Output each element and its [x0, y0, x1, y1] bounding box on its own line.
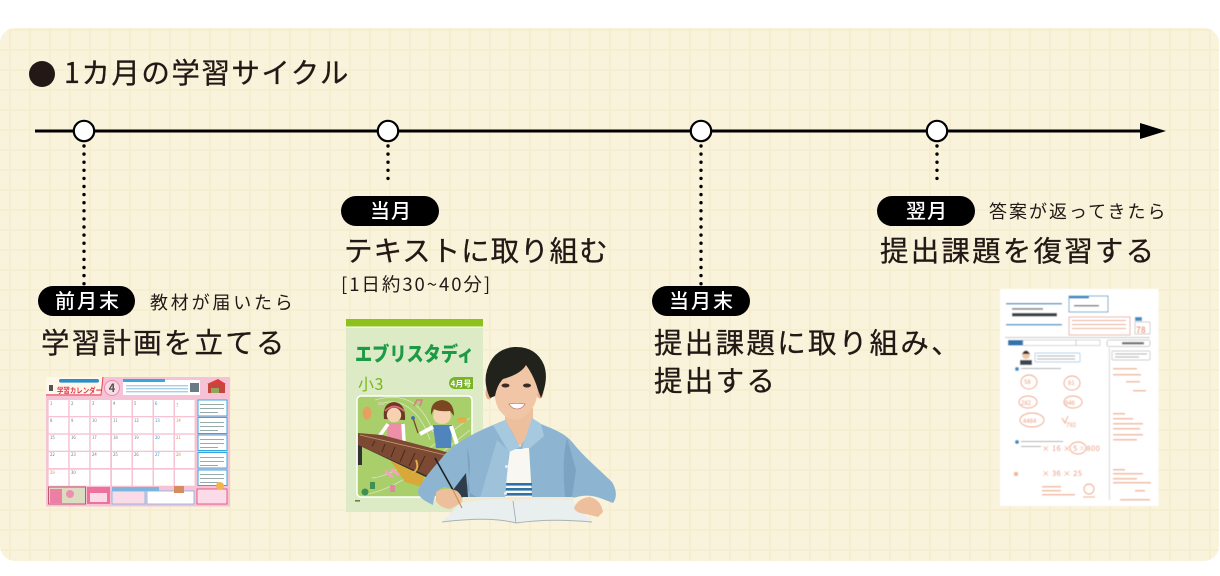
textbook logo: エブリスタディ: [355, 338, 474, 367]
boy shirt collar and placket: [480, 418, 544, 498]
sheet handwritten answers: 81: [1068, 378, 1075, 387]
image: returned assignment sheet: [1000, 289, 1158, 506]
calendar date numbers: 7: [176, 403, 179, 409]
calendar date numbers: 14: [176, 418, 181, 424]
dotted connector: 前月末: [82, 146, 86, 284]
dotted connector: 当月末: [699, 146, 703, 284]
step title: 学習計画を立てる: 学習計画を立てる: [41, 321, 287, 362]
duration note: [1日約30~40分]: [341, 271, 492, 297]
dotted connector: 翌月: [935, 146, 939, 182]
calendar date numbers: 11: [113, 418, 118, 424]
sheet question marks: [1015, 367, 1063, 447]
note: 答案が返ってきたら: 答案が返ってきたら: [989, 198, 1168, 224]
boy shirt: [418, 418, 616, 505]
girl: [378, 402, 405, 477]
boy on cover: [411, 400, 457, 448]
calendar date numbers: 30: [71, 470, 76, 476]
step: 前月末: [38, 285, 296, 362]
calendar date numbers: 1: [50, 401, 53, 407]
badge: 当月: [341, 195, 439, 226]
image: learning calendar: [46, 377, 230, 506]
dotted connector: 当月: [386, 146, 390, 182]
sheet header: 78: [1136, 324, 1146, 336]
calendar date numbers: 18: [113, 435, 118, 441]
image: boy studying: [418, 347, 616, 523]
boy head: [486, 347, 546, 420]
sheet handwritten answers: 4484: [1023, 416, 1037, 425]
timeline marker 3: [691, 121, 711, 141]
boy pencil: [435, 458, 453, 490]
sheet vertical divider: [1108, 348, 1111, 500]
timeline arrow: [35, 123, 1166, 139]
calendar bottom band: [48, 482, 227, 504]
calendar date numbers: 15: [50, 435, 55, 441]
textbook illustration: [357, 396, 472, 497]
music notes: [362, 400, 467, 496]
step title: 提出課題を復習する: 提出課題を復習する: [880, 229, 1156, 270]
calendar date numbers: 23: [71, 452, 76, 458]
calendar date numbers: 24: [92, 452, 97, 458]
textbook issue badge: 4月号: [451, 378, 471, 390]
step title: 提出課題に取り組み: 提出課題に取り組み、: [654, 321, 962, 362]
calendar date numbers: 13: [155, 418, 160, 424]
note: 教材が届いたら: 教材が届いたら: [150, 289, 296, 315]
badge: 翌月: [877, 195, 975, 226]
badge: 前月末: [38, 285, 135, 316]
badge: 翌月: 翌月: [906, 195, 948, 224]
calendar date numbers: 16: [71, 435, 76, 441]
calendar date numbers: 21: [176, 435, 181, 441]
calendar date numbers: 27: [155, 452, 160, 458]
image: textbook cover: [346, 319, 483, 512]
calendar date grid: [49, 400, 195, 486]
sheet handwritten answers: 282: [1021, 398, 1032, 407]
heading: 1カ月の学習サイクル: [64, 51, 350, 92]
timeline marker 1: [74, 121, 94, 141]
step title: テキストに取り組む: テキストに取り組む: [344, 229, 609, 270]
calendar date numbers: 26: [134, 452, 139, 458]
calendar date numbers: [50, 401, 181, 476]
calendar date numbers: 22: [50, 452, 55, 458]
boy t-shirt: [504, 447, 532, 498]
calendar date numbers: 20: [155, 435, 160, 441]
step: 当月: [341, 195, 609, 297]
calendar date numbers: 9: [71, 418, 74, 424]
badge: 当月末: [652, 285, 750, 316]
boy hands: [436, 489, 462, 509]
calendar date numbers: 12: [134, 418, 139, 424]
sheet header: [1005, 296, 1150, 338]
sheet handwritten answers: × 36 × 25: [1042, 468, 1082, 479]
xylophone: [358, 433, 450, 487]
notebook: [442, 499, 592, 523]
badge: 前月末: 前月末: [55, 285, 121, 314]
calendar date numbers: 2: [71, 401, 74, 407]
sheet handwritten answers: 792: [1066, 420, 1077, 429]
calendar date numbers: 8: [50, 418, 53, 424]
calendar date numbers: 3: [92, 401, 95, 407]
calendar date numbers: 6: [155, 401, 158, 407]
calendar date numbers: 17: [92, 435, 97, 441]
sheet answers in orange: [1019, 375, 1095, 497]
calendar date numbers: 25: [113, 452, 118, 458]
sheet title bar: [1008, 340, 1150, 346]
calendar date numbers: 5: [134, 401, 137, 407]
badge: 当月末: 当月末: [669, 285, 735, 314]
calendar side notes: [198, 400, 227, 486]
desk edge: [463, 497, 573, 503]
calendar date numbers: 29: [50, 470, 55, 476]
sheet teacher comment: [1020, 350, 1150, 365]
step title line 2: 提出する: 提出する: [654, 359, 777, 400]
sheet handwritten answers: 946: [1065, 398, 1076, 407]
sheet handwritten answers: [1021, 377, 1100, 479]
step: 当月末: [652, 285, 962, 400]
timeline marker 2: [378, 121, 398, 141]
step: 翌月: [877, 195, 1168, 270]
sheet handwritten answers: 58: [1024, 377, 1031, 386]
badge: 当月: 当月: [370, 195, 412, 224]
calendar date numbers: 19: [134, 435, 139, 441]
image: learning calendar: 学習カレンダー: [57, 385, 102, 396]
textbook grade: 小3: [358, 371, 384, 395]
calendar date numbers: 4: [113, 401, 116, 407]
boy undershadow: [453, 473, 468, 497]
calendar date numbers: 10: [92, 418, 97, 424]
sheet handwritten answers: × 16 × 5 = 800: [1042, 443, 1100, 454]
calendar date numbers: 28: [176, 452, 181, 458]
image: learning calendar: 4: [109, 380, 116, 396]
timeline marker 4: [927, 121, 947, 141]
boy neck: [505, 408, 533, 445]
